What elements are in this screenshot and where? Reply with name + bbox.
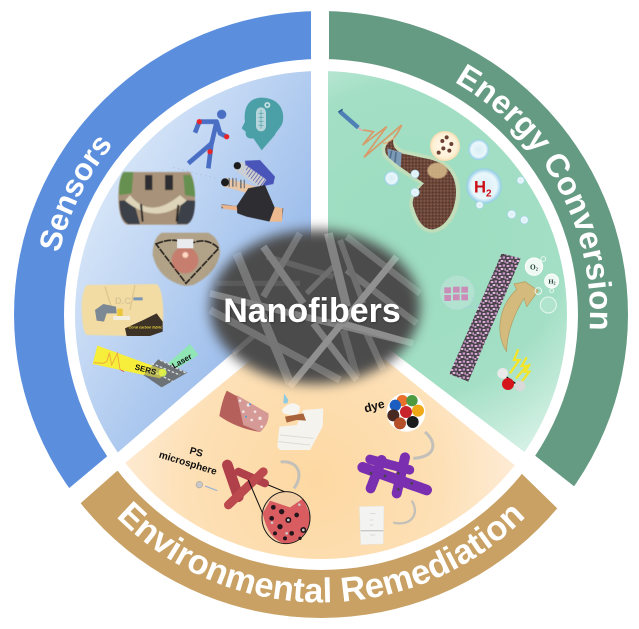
icon: water molecule	[497, 368, 525, 391]
icon: oxygen bubble: O	[530, 262, 536, 271]
icon: hydrogen small bubble: 2	[554, 280, 556, 285]
photo: lab coat and carbon fabric: Coral carbon fabric	[129, 325, 162, 329]
icon: empty bubbles	[535, 257, 556, 313]
label: H2: 2	[486, 189, 492, 200]
panel: inner disc	[75, 71, 567, 559]
icon: walking figure	[173, 110, 229, 179]
photo: lab coat and carbon fabric	[82, 284, 163, 336]
callout: zoomed pore circle	[248, 480, 311, 544]
ring segment: sensors	[14, 11, 311, 488]
icon: beaker	[359, 506, 384, 545]
illustration: porous red fibers	[227, 465, 265, 505]
illustration: nanofiber particle	[382, 135, 460, 233]
illustration: purple fibers	[363, 457, 427, 493]
label: PS microsphere: microsphere	[157, 450, 218, 478]
arrow: curved gray right bottom	[393, 501, 415, 523]
illustration: nanorod with pink cubes	[449, 253, 521, 382]
callout: cube cluster	[440, 275, 478, 310]
arrow: curved gold arrow	[500, 282, 538, 352]
illustration group: remediation	[157, 391, 433, 545]
icon: electrospinning syringe	[338, 109, 402, 157]
illustration group: energy conversion	[338, 109, 559, 391]
heading: Sensors: Sensors	[40, 138, 110, 251]
illustration group: sensors	[82, 98, 283, 387]
icon: dye colour wheel	[387, 393, 425, 432]
photo: fibrous sponge	[219, 391, 268, 432]
icon: energy bolts	[510, 349, 530, 382]
icon: small bubbles	[384, 139, 529, 224]
chart: SEM nanofiber ellipse	[200, 220, 429, 394]
icon: hydrogen small bubble: H	[548, 278, 554, 285]
panel: remediation background	[126, 358, 515, 559]
panel: sensors background	[75, 71, 311, 452]
photo: shirt sensor	[118, 172, 195, 225]
photo: glowing textile	[153, 233, 220, 286]
arrow: curved gray right top	[413, 432, 433, 458]
diagram: SERS and laser	[93, 344, 198, 387]
icon: catalyst particles circle	[430, 131, 460, 161]
arrow: curved gray left	[281, 462, 299, 488]
icon: hydrogen bubble	[466, 168, 502, 204]
heading: Energy Conversion: Energy Conversion	[456, 64, 612, 329]
label: Laser: Laser	[170, 352, 193, 370]
label: dye: dye	[362, 397, 386, 416]
icon: hydrogen small bubble	[545, 274, 559, 288]
label: H2: H	[474, 177, 486, 196]
icon: oxygen bubble	[525, 258, 543, 275]
icon: head with sensor	[242, 98, 283, 150]
label: PS microsphere: PS	[188, 446, 204, 460]
heading: Environmental Remediation: Environmental Remediation	[118, 501, 525, 603]
ring segment: energy conversion	[329, 11, 628, 486]
label: SERS: SERS	[134, 363, 158, 377]
title: Nanofibers: Nanofibers	[223, 292, 401, 330]
icon: PS sphere	[196, 481, 217, 491]
icon: oxygen bubble: 2	[536, 266, 538, 271]
photo: lab coat and carbon fabric: D.C	[115, 296, 131, 306]
icon: sensor glove	[221, 160, 283, 222]
ring segment: environmental remediation	[80, 471, 558, 618]
panel: energy conversion background	[328, 71, 567, 452]
photo: white membrane and bottle	[277, 393, 323, 450]
